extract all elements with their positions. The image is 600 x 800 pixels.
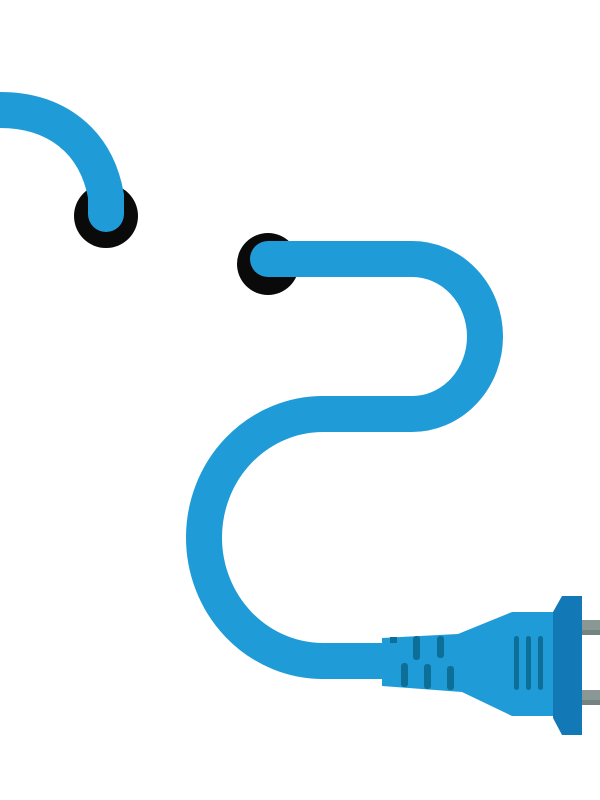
plug head	[553, 596, 582, 735]
pins	[578, 620, 600, 635]
socket ring: left	[74, 184, 138, 248]
collar ridges	[390, 637, 397, 643]
plug	[382, 596, 600, 735]
socket ring: right	[237, 233, 299, 295]
cable: S-shaped main segment	[204, 233, 485, 661]
plug body	[382, 612, 556, 716]
cable: upper left segment	[0, 110, 138, 248]
grip slots	[514, 636, 519, 690]
